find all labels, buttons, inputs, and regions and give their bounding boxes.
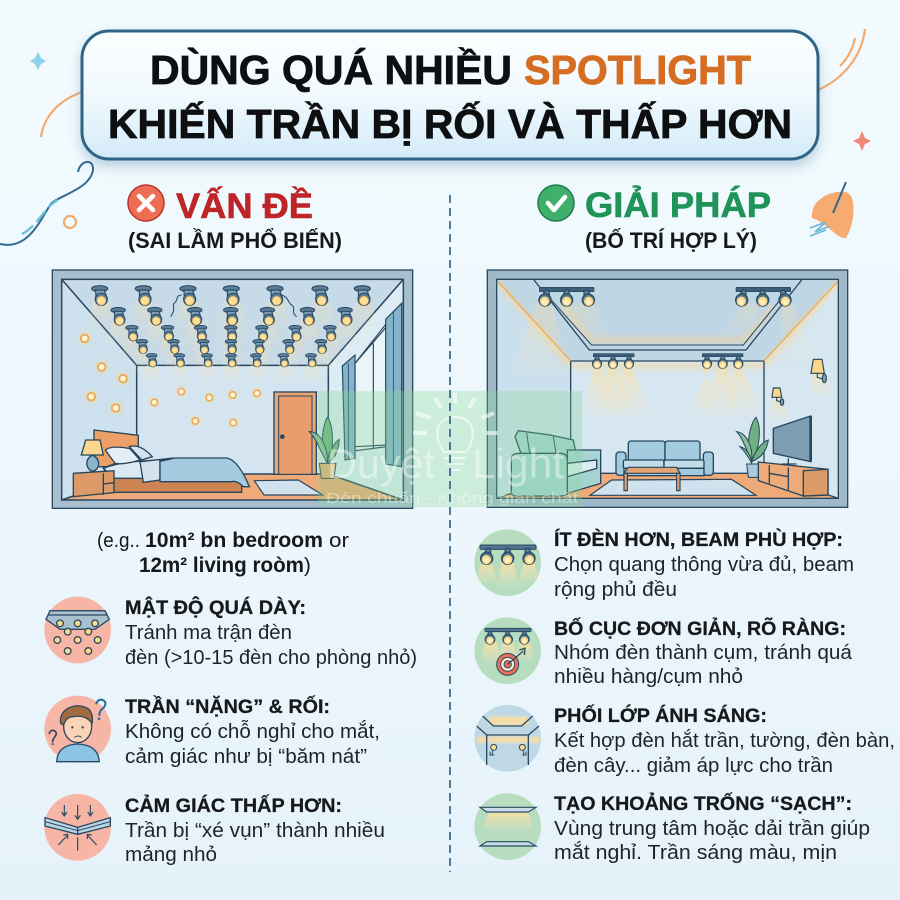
body: Nhóm đèn thành cụm, tránh quá bbox=[554, 641, 853, 664]
heading: TẠO KHOẢNG TRỐNG “SẠCH”: bbox=[554, 791, 852, 815]
rug bbox=[254, 480, 323, 495]
body bbox=[554, 553, 854, 601]
solution item: clean space bbox=[474, 791, 870, 864]
illustration: cluttered bedroom bbox=[52, 270, 413, 508]
body: Không có chỗ nghỉ cho mắt, bbox=[125, 720, 380, 743]
rug bbox=[590, 479, 756, 495]
icon: bulb with rays bbox=[413, 393, 498, 470]
left armchair sofa bbox=[511, 431, 601, 496]
title panel bbox=[82, 31, 818, 159]
body: Trần bị “xé vụn” thành nhiều bbox=[125, 819, 385, 842]
body: nhiều hàng/cụm nhỏ bbox=[554, 665, 743, 688]
caption example: 12m² living roòm bbox=[139, 554, 304, 577]
heading: BỐ CỤC ĐƠN GIẢN, RÕ RÀNG: bbox=[554, 616, 846, 640]
body: đèn (>10-15 đèn cho phòng nhỏ) bbox=[125, 646, 417, 669]
body: cảm giác như bị “băm nát” bbox=[125, 745, 367, 768]
body bbox=[125, 720, 380, 768]
decorative squiggle left bbox=[0, 162, 93, 245]
subheading: (SAI LẦM PHỔ BIẾN) bbox=[128, 228, 342, 253]
body: mắt nghỉ. Trần sáng màu, mịn bbox=[554, 841, 837, 864]
heading: ÍT ĐÈN HƠN, BEAM PHÙ HỢP: bbox=[554, 527, 843, 551]
body: mảng nhỏ bbox=[125, 843, 217, 866]
coffee table bbox=[624, 467, 680, 491]
body bbox=[554, 817, 870, 864]
heading: TRẦN “NẶNG” & RỐI: bbox=[125, 694, 330, 718]
icon: confused person bbox=[44, 696, 111, 762]
title highlight: SPOTLIGHT bbox=[524, 47, 751, 93]
heading: solution bbox=[538, 185, 771, 253]
caption example bbox=[97, 529, 349, 577]
icon: clean gap bbox=[474, 793, 541, 860]
title line 1: DÙNG QUÁ NHIỀU bbox=[150, 47, 512, 93]
watermark brand: right: Light bbox=[472, 440, 564, 487]
heading text: GIẢI PHÁP bbox=[585, 185, 771, 225]
ceiling spotlights bbox=[85, 286, 379, 386]
subheading: (BỐ TRÍ HỢP LÝ) bbox=[585, 227, 757, 253]
body bbox=[554, 729, 895, 777]
problem item: density bbox=[44, 595, 417, 669]
body bbox=[125, 621, 417, 669]
LED cove glow bbox=[498, 283, 837, 366]
TV and console bbox=[758, 416, 828, 496]
question marks bbox=[49, 700, 105, 745]
watermark brand: left: Duyệt bbox=[327, 440, 435, 487]
body: rộng phủ đều bbox=[554, 578, 677, 601]
decorative sparkle: blue star bbox=[30, 52, 46, 70]
heading: CẢM GIÁC THẤP HƠN: bbox=[125, 794, 342, 817]
icon: compressed ceiling bbox=[44, 794, 111, 861]
wires bbox=[171, 295, 297, 317]
solution item: simple layout bbox=[474, 616, 853, 688]
decorative sparkle: coral star bbox=[853, 131, 871, 151]
bed bbox=[94, 430, 249, 492]
center dashed divider bbox=[449, 195, 451, 872]
watermark slogan: Đèn chuẩn - Không gian chất bbox=[326, 490, 579, 507]
problem item: heavy ceiling bbox=[44, 694, 380, 768]
decorative swirl top left bbox=[41, 92, 82, 137]
body: Chọn quang thông vừa đủ, beam bbox=[554, 553, 854, 576]
illustration: well-lit living room bbox=[487, 270, 848, 507]
caption example: ) bbox=[304, 554, 311, 577]
heading: PHỐI LỚP ÁNH SÁNG: bbox=[554, 703, 767, 727]
track lights top bbox=[538, 287, 792, 368]
body bbox=[125, 819, 385, 866]
body: Tránh ma trận đèn bbox=[125, 621, 292, 644]
back sofa bbox=[616, 441, 713, 476]
heading text: VẤN ĐỀ bbox=[176, 186, 313, 226]
light beams bbox=[510, 303, 835, 423]
caption example: 10m² bn bedroom bbox=[145, 529, 323, 552]
heading: MẬT ĐỘ QUÁ DÀY: bbox=[125, 595, 306, 619]
title line 2: KHIẾN TRẦN BỊ RỐI VÀ THẤP HƠN bbox=[108, 101, 792, 147]
body: đèn cây... giảm áp lực cho trần bbox=[554, 754, 833, 777]
wall sconces bbox=[772, 359, 826, 405]
plant bbox=[737, 417, 768, 477]
ceiling tray lines bbox=[497, 279, 838, 498]
solution item: fewer lights bbox=[474, 527, 854, 601]
heading: problem bbox=[128, 185, 342, 253]
icon: track lights bbox=[474, 529, 541, 596]
decorative leaf right bbox=[810, 182, 854, 238]
icon: red cross bbox=[128, 185, 164, 221]
body: Vùng trung tâm hoặc dải trần giúp bbox=[554, 817, 870, 840]
window and curtains bbox=[342, 303, 402, 467]
lamp and nightstand bbox=[73, 440, 114, 497]
door bbox=[274, 392, 316, 474]
solution item: layered light bbox=[474, 703, 895, 777]
icon: green check bbox=[538, 185, 574, 221]
caption example: (e.g.. bbox=[97, 529, 140, 552]
icon: track and target bbox=[474, 617, 541, 684]
body bbox=[554, 641, 853, 688]
icon: layered room bbox=[474, 705, 541, 772]
caption example: or bbox=[329, 529, 349, 552]
wall downlights bbox=[79, 333, 262, 427]
plant bbox=[309, 417, 339, 478]
decorative swirl top right bbox=[818, 29, 865, 90]
icon: dense lights bbox=[44, 597, 111, 663]
body: Kết hợp đèn hắt trần, tường, đèn bàn, bbox=[554, 729, 895, 752]
problem item: lower feeling bbox=[44, 794, 385, 866]
watermark bbox=[318, 391, 582, 507]
